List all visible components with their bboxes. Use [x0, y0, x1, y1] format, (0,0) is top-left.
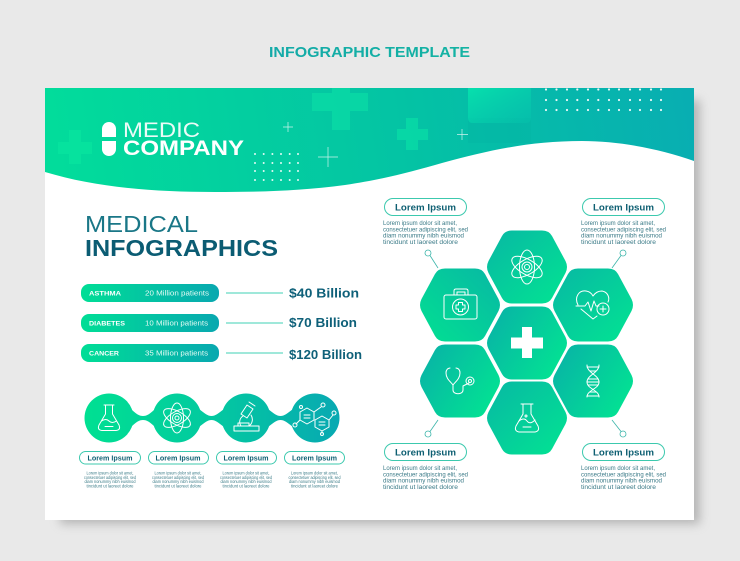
row: diabetes: DIABETES	[89, 320, 126, 328]
callout: bottom left: Lorem ipsum dolor sit amet,	[383, 466, 457, 472]
caption 4	[284, 452, 344, 488]
row: cancer: CANCER	[89, 350, 119, 358]
callout: top right: Lorem ipsum dolor sit amet,	[581, 221, 655, 227]
callout: bottom right: tincidunt ut laoreet dolore	[581, 485, 657, 491]
circle chain shape	[84, 394, 340, 442]
connector: top left	[425, 250, 438, 268]
row: cancer: $120 Billion	[289, 347, 362, 362]
caption 2	[148, 452, 208, 488]
connector: bottom left	[425, 420, 438, 437]
logo wordmark	[123, 119, 244, 160]
heading: medical infographics: INFOGRAPHICS	[85, 235, 278, 261]
icon: molecule	[293, 403, 336, 436]
callout: bottom right: consectetuer adipiscing elit, sed	[581, 472, 666, 478]
row: diabetes: $70 Billion	[289, 315, 357, 330]
caption 3	[216, 452, 276, 488]
callout: top right: tincidunt ut laoreet dolore	[581, 240, 657, 246]
caption 4: tincidunt ut laoreet dolore	[291, 483, 338, 488]
caption 2: consectetuer adipiscing elit, sed	[152, 475, 204, 480]
caption 1: consectetuer adipiscing elit, sed	[84, 475, 136, 480]
caption 1: Lorem Ipsum	[88, 454, 133, 462]
page title: INFOGRAPHIC TEMPLATE	[269, 44, 470, 61]
chain of four icon circles	[84, 394, 340, 442]
caption 2: Lorem ipsum dolor sit amet,	[154, 470, 202, 476]
heading: medical infographics	[85, 211, 278, 261]
row: cancer	[81, 344, 362, 362]
caption 3: diam nonummy nibh euismod	[220, 479, 272, 484]
hexagon cluster	[420, 230, 633, 454]
panel: white card	[45, 88, 694, 520]
hexagon: flask	[487, 382, 567, 454]
callout: bottom left: tincidunt ut laoreet dolore	[383, 485, 459, 491]
callout: top left: Lorem Ipsum	[395, 202, 456, 214]
captions under chain	[80, 452, 344, 488]
callout: bottom right	[581, 444, 666, 491]
callout: top left	[383, 198, 468, 246]
caption 1: tincidunt ut laoreet dolore	[86, 483, 134, 488]
callout: top left: tincidunt ut laoreet dolore	[383, 240, 459, 246]
caption 4: Lorem Ipsum	[292, 454, 337, 462]
caption 1: Lorem ipsum dolor sit amet,	[86, 470, 134, 476]
callout: top left: Lorem ipsum dolor sit amet,	[383, 221, 457, 227]
caption 3: consectetuer adipiscing elit, sed	[220, 475, 272, 480]
callout: top right	[581, 198, 666, 246]
icon: capsule	[102, 122, 116, 156]
icon: atom	[161, 403, 193, 433]
row: asthma: ASTHMA	[89, 290, 121, 298]
row: asthma: $40 Billion	[289, 286, 359, 300]
caption 4: consectetuer adipiscing elit, sed	[288, 475, 341, 480]
hexagon: medical kit	[420, 268, 500, 342]
callout: bottom right: Lorem ipsum dolor sit amet,	[581, 466, 655, 472]
icon: microscope	[234, 402, 259, 431]
hexagon: stethoscope	[420, 344, 500, 418]
logo: medic company	[102, 119, 244, 160]
row: asthma: 20 Million patients	[145, 290, 210, 298]
caption 4: Lorem ipsum dolor sit amet,	[291, 470, 338, 476]
connector: bottom right	[612, 420, 626, 437]
row: cancer: 35 Million patients	[145, 350, 209, 358]
hexagon: dna	[553, 344, 633, 418]
logo wordmark: COMPANY	[123, 137, 244, 160]
callout: bottom left: Lorem Ipsum	[395, 448, 456, 458]
caption 2: diam nonummy nibh euismod	[152, 479, 204, 484]
caption 3: tincidunt ut laoreet dolore	[222, 483, 270, 488]
stat rows: disease cost	[81, 284, 362, 362]
caption 3: Lorem Ipsum	[224, 454, 269, 462]
row: asthma	[81, 284, 359, 302]
callout: bottom right: diam nonummy nibh euismod	[581, 479, 662, 485]
connector: top right	[612, 250, 626, 268]
heading: medical infographics: MEDICAL	[85, 211, 198, 237]
callout: top left: diam nonummy nibh euismod	[383, 234, 464, 240]
caption 2: tincidunt ut laoreet dolore	[154, 483, 202, 488]
panel: card shadow	[60, 100, 700, 524]
callout: top right: diam nonummy nibh euismod	[581, 234, 662, 240]
caption 3: Lorem ipsum dolor sit amet,	[222, 470, 270, 476]
panel: header wave	[45, 88, 694, 192]
icon: flask	[98, 405, 120, 430]
row: diabetes	[81, 314, 357, 332]
callout: bottom left: diam nonummy nibh euismod	[383, 479, 464, 485]
row: diabetes: 10 Million patients	[145, 320, 209, 328]
callout: bottom left: consectetuer adipiscing elit, sed	[383, 472, 468, 478]
callout: bottom left	[383, 444, 468, 491]
logo wordmark: MEDIC	[123, 119, 200, 142]
callout: top left: consectetuer adipiscing elit, sed	[383, 227, 468, 233]
hexagon: center cross	[487, 306, 567, 380]
callout: top right: Lorem Ipsum	[593, 202, 654, 214]
caption 4: diam nonummy nibh euismod	[289, 479, 340, 484]
callout: top right: consectetuer adipiscing elit, sed	[581, 227, 666, 233]
caption 1	[80, 452, 140, 488]
caption 1: diam nonummy nibh euismod	[84, 479, 136, 484]
hexagon: atom	[487, 230, 567, 304]
hexagon: heart pulse	[553, 268, 633, 342]
callout: bottom right: Lorem Ipsum	[593, 448, 654, 458]
caption 2: Lorem Ipsum	[156, 454, 201, 462]
